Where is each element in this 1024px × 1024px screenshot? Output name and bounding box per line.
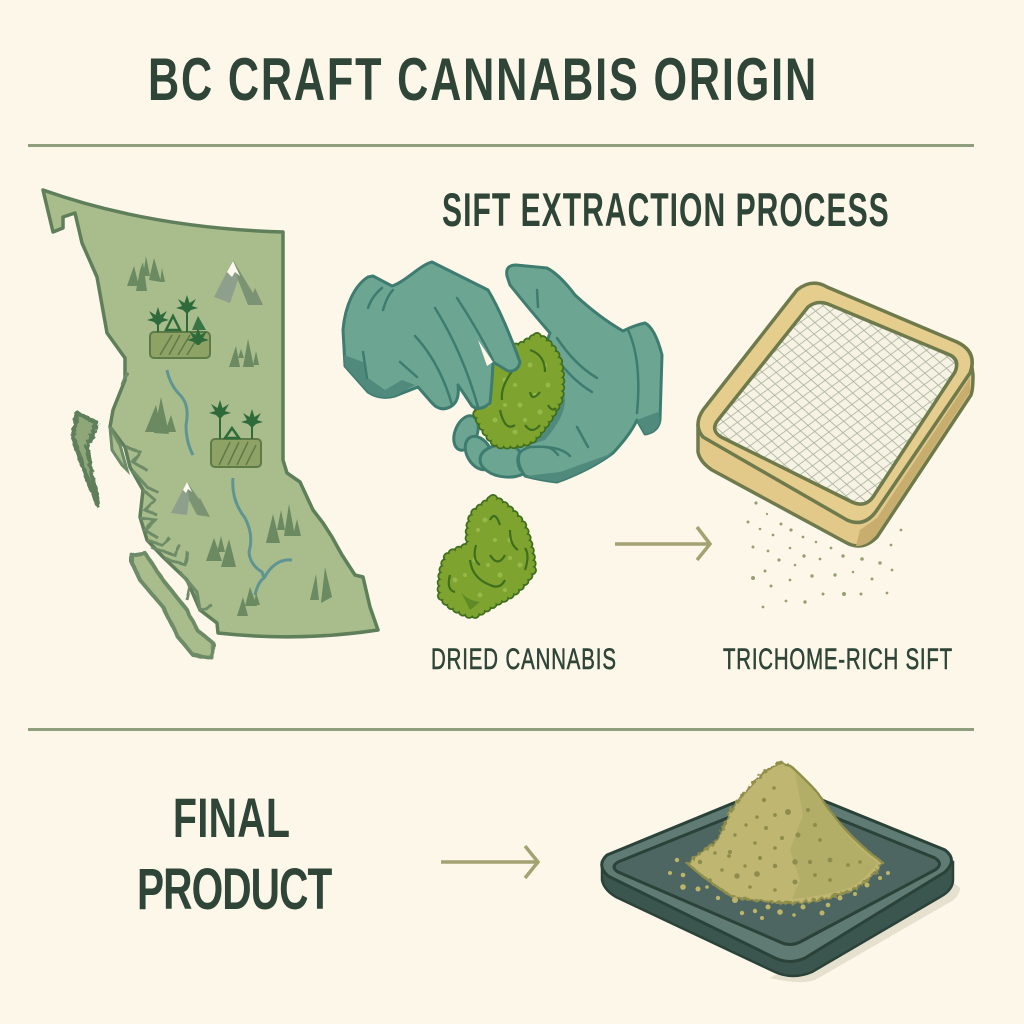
right glove xyxy=(500,265,662,482)
farm field: north xyxy=(147,295,210,358)
tray well xyxy=(614,798,940,944)
heading: final product: FINAL xyxy=(173,787,290,850)
sieve mesh xyxy=(715,303,957,504)
illustration: dried cannabis bud xyxy=(442,499,532,615)
left glove xyxy=(343,262,520,409)
map: Vancouver Island xyxy=(132,553,213,658)
illustration: sift screen xyxy=(698,283,973,546)
trees xyxy=(127,256,332,616)
tray rim xyxy=(602,786,952,962)
glove shading xyxy=(525,387,660,482)
heading: final product xyxy=(137,787,333,922)
tray body xyxy=(602,862,953,976)
sift pile xyxy=(687,763,883,903)
sieve side shade xyxy=(856,378,970,546)
label: trichome-rich sift: TRICHOME-RICH SIFT xyxy=(723,643,952,676)
loose grains xyxy=(668,858,890,920)
tray shadow xyxy=(770,880,960,982)
heading: final product: PRODUCT xyxy=(137,857,333,922)
arrow: to sieve xyxy=(615,527,710,560)
arrow: to final product xyxy=(441,846,538,878)
sieve rim xyxy=(698,283,972,522)
left glove shading and finger lines xyxy=(344,288,493,407)
mountain: south xyxy=(171,482,210,517)
sieve body xyxy=(698,360,973,546)
title: BC CRAFT CANNABIS ORIGIN xyxy=(148,47,816,114)
map: Haida Gwaii xyxy=(73,413,98,505)
panel: BC map xyxy=(43,190,378,658)
river with tributary xyxy=(233,478,292,595)
glove fold lines xyxy=(518,290,638,470)
illustration: gloved hands with bud xyxy=(343,262,662,482)
bud in hand xyxy=(477,337,560,444)
farm field: south xyxy=(209,400,263,467)
label: dried cannabis: DRIED CANNABIS xyxy=(431,643,616,676)
heading: sift extraction process: SIFT EXTRACTION PROCESS xyxy=(442,184,889,237)
map: fjord coastline xyxy=(122,372,212,610)
lower fingers xyxy=(449,412,533,479)
illustration: tray with sift pile xyxy=(602,763,960,982)
river xyxy=(167,370,193,455)
mountain: north xyxy=(214,260,263,305)
falling trichome particles xyxy=(746,501,902,608)
map: mainland xyxy=(43,190,378,637)
map: coastal islet xyxy=(110,427,127,470)
